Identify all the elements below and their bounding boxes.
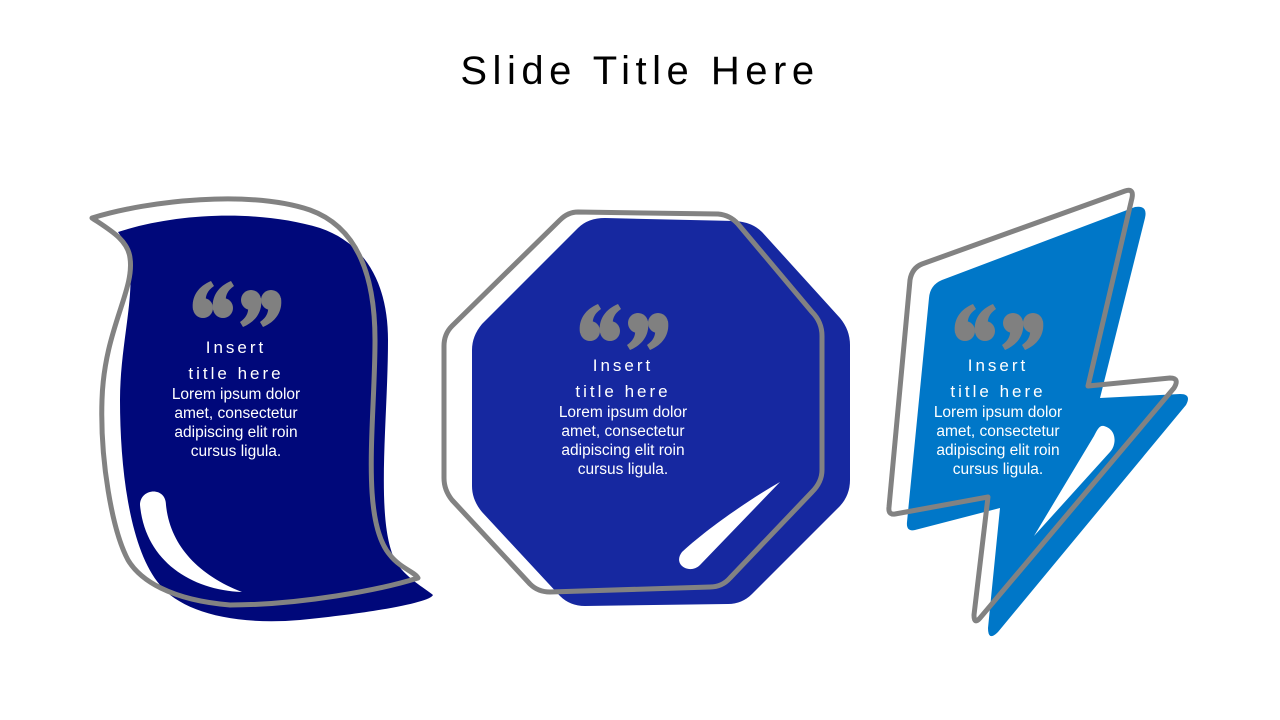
text: body: cursus ligula. bbox=[578, 461, 668, 478]
text: body: Lorem ipsum dolor bbox=[172, 386, 300, 403]
text: body: adipiscing elit roin bbox=[174, 424, 298, 441]
icon: quote marks bbox=[193, 281, 281, 327]
text: body: amet, consectetur bbox=[174, 405, 298, 422]
text: body: adipiscing elit roin bbox=[936, 442, 1060, 459]
panel: lightning quote: title here bbox=[950, 382, 1046, 401]
icon: quote marks bbox=[955, 304, 1043, 350]
text: body: Lorem ipsum dolor bbox=[934, 404, 1062, 421]
panel: wave quote: title here bbox=[188, 364, 284, 383]
text: heading: Insert bbox=[968, 356, 1028, 375]
text: body: adipiscing elit roin bbox=[561, 442, 685, 459]
text: body: cursus ligula. bbox=[191, 443, 281, 460]
title: Slide Title Here bbox=[460, 49, 820, 93]
panel: wave quote bbox=[92, 199, 433, 621]
text: body: cursus ligula. bbox=[953, 461, 1043, 478]
text: heading: Insert bbox=[593, 356, 653, 375]
panel: octagon quote bbox=[444, 212, 850, 606]
panel: lightning quote bbox=[889, 190, 1188, 636]
text: body: Lorem ipsum dolor bbox=[559, 404, 687, 421]
text: body: amet, consectetur bbox=[936, 423, 1060, 440]
icon: quote marks bbox=[580, 304, 668, 350]
text: heading: Insert bbox=[206, 338, 266, 357]
panel: octagon quote: title here bbox=[575, 382, 671, 401]
text: body: amet, consectetur bbox=[561, 423, 685, 440]
